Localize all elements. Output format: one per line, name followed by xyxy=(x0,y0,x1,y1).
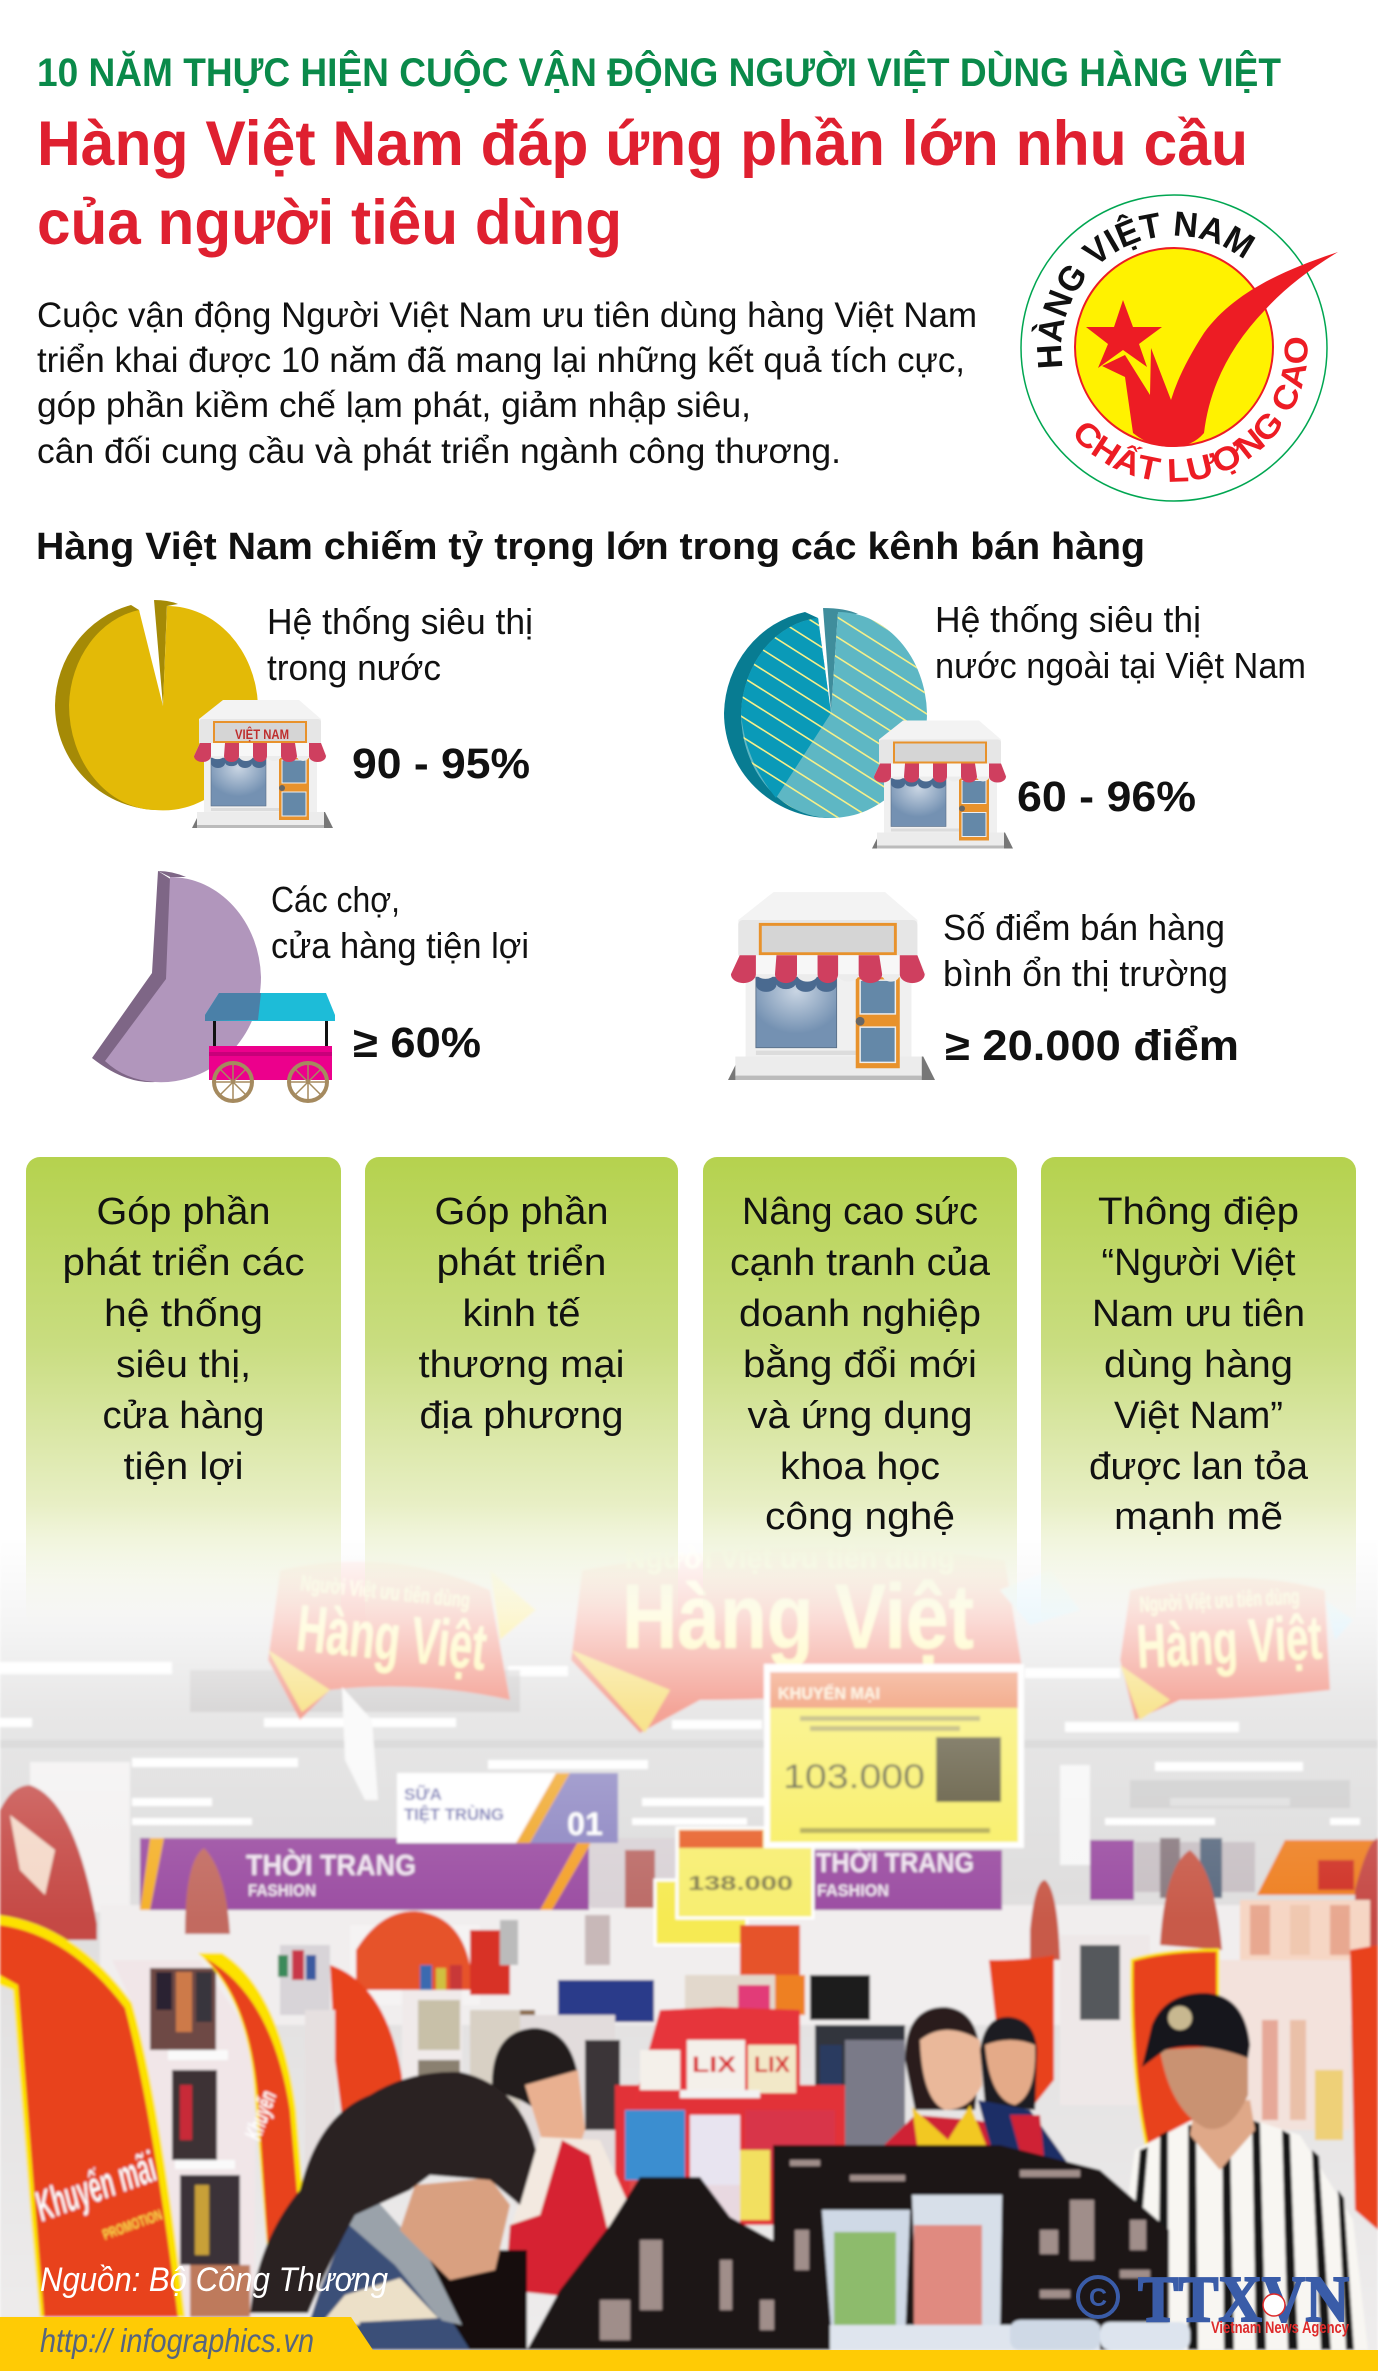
plastic containers xyxy=(822,2195,1190,2350)
panel: markets and convenience stores xyxy=(92,871,529,1101)
intro paragraph: góp phần kiềm chế lạm phát, giảm nhập siêu, xyxy=(37,386,751,425)
panel: foreign supermarkets xyxy=(724,604,1304,848)
panel: market stabilisation points xyxy=(728,892,1239,1080)
banners Hàng Việt: Người Việt ưu tiên dùng xyxy=(299,1570,471,1613)
logo: Hàng Việt Nam chất lượng cao: HÀNG VIỆT NAM xyxy=(1031,212,1256,368)
logo: TTXVN: C xyxy=(1089,2284,1107,2312)
card 3: bằng đổi mới xyxy=(743,1343,977,1386)
card 2: kinh tế xyxy=(462,1293,580,1335)
store sign: VIỆT NAM xyxy=(235,725,289,742)
purple band right xyxy=(813,1850,1002,1910)
banners Hàng Việt xyxy=(268,1561,536,1720)
label: nước ngoài tại Việt Nam xyxy=(935,645,1306,686)
card 3: doanh nghiệp xyxy=(739,1293,981,1335)
pie chart: 60-96% xyxy=(724,608,927,818)
card 2: phát triển xyxy=(436,1242,606,1284)
logo: Hàng Việt Nam chất lượng cao: CHẤT LƯỢNG CAO xyxy=(1076,338,1308,482)
photo: supermarket scene: Người Việt ưu tiên dùng xyxy=(625,1542,955,1575)
intro paragraph: cân đối cung cầu và phát triển ngành công thương. xyxy=(37,432,841,471)
banners Hàng Việt: Hàng Việt xyxy=(294,1590,490,1684)
value: ≥ 60% xyxy=(353,1019,481,1067)
woman 3 xyxy=(879,2007,1030,2165)
intro paragraph xyxy=(37,296,977,471)
card 4: dùng hàng xyxy=(1104,1344,1293,1386)
man 2 xyxy=(978,2017,1080,2180)
photo: supermarket scene: 138.000 xyxy=(688,1873,793,1895)
promo sign: 103.000 xyxy=(783,1758,925,1796)
card 3: Nâng cao sức xyxy=(742,1191,978,1233)
card 3 xyxy=(703,1157,1017,1627)
LIX product stacks: LIX xyxy=(692,2052,736,2077)
woman in foreground xyxy=(250,2072,536,2350)
shelf column left xyxy=(112,1960,255,2317)
white fade over photo xyxy=(0,1500,1378,1920)
logo: TTXVN: TTXVN xyxy=(1138,2263,1349,2336)
sign: Sữa tiệt trùng: TIỆT TRÙNG xyxy=(404,1805,504,1824)
logo: Hàng Việt Nam chất lượng cao xyxy=(1020,194,1338,502)
ceiling lights xyxy=(0,1662,1360,1825)
photo: supermarket scene: FASHION xyxy=(248,1881,316,1900)
title: red headline xyxy=(37,109,1248,258)
card 4: “Người Việt xyxy=(1102,1242,1296,1284)
card 4: được lan tỏa xyxy=(1089,1446,1309,1488)
section heading: Hàng Việt Nam chiếm tỷ trọng lớn trong các kênh bán hàng xyxy=(36,526,1145,568)
red display: left big: PROMOTION xyxy=(101,2207,165,2244)
promo sign: KHUYẾN MẠI xyxy=(778,1684,880,1703)
sign: Sữa tiệt trùng: SỮA xyxy=(404,1784,442,1804)
card 4: mạnh mẽ xyxy=(1114,1496,1283,1538)
label: bình ổn thị trường xyxy=(943,953,1228,994)
card 2: địa phương xyxy=(420,1395,624,1437)
card 1: siêu thị, xyxy=(116,1344,251,1386)
card 1 xyxy=(26,1157,341,1627)
label: trong nước xyxy=(267,647,441,688)
red display: third xyxy=(330,1965,404,2140)
card 4: Việt Nam” xyxy=(1114,1395,1283,1437)
LIX product stacks xyxy=(615,2007,845,2265)
card 3: và ứng dụng xyxy=(748,1395,972,1437)
pie chart: 60% xyxy=(92,871,261,1082)
sign: Sữa tiệt trùng: 01 xyxy=(567,1806,603,1842)
photo: supermarket scene xyxy=(0,1540,1378,2371)
panel: domestic supermarkets xyxy=(55,600,533,828)
label: Số điểm bán hàng xyxy=(943,907,1225,948)
title: red headline: Hàng Việt Nam đáp ứng phần lớn nhu cầu xyxy=(37,109,1248,179)
black bags xyxy=(527,2145,1169,2350)
footer yellow band xyxy=(0,2317,1378,2371)
source text: Nguồn: Bộ Công Thương xyxy=(40,2261,388,2299)
card 3: khoa học xyxy=(780,1446,940,1488)
woman with red apron xyxy=(492,2028,650,2300)
mid shelves row xyxy=(350,1925,480,2005)
photo: supermarket scene: Hàng Việt xyxy=(622,1566,974,1668)
icon: store large xyxy=(728,892,935,1080)
title: red headline: của người tiêu dùng xyxy=(37,188,622,258)
lower wall xyxy=(100,1905,1378,2025)
label xyxy=(935,599,1306,686)
intro paragraph: triển khai được 10 năm đã mang lại những kết quả tích cực, xyxy=(37,341,965,380)
card 2: thương mại xyxy=(418,1344,624,1386)
dark garment xyxy=(422,2250,527,2350)
left pink arch xyxy=(0,1785,97,1940)
purple band left xyxy=(140,1838,589,1910)
red display: left big xyxy=(0,1915,185,2317)
small pink arches xyxy=(185,1848,230,1934)
intro paragraph: Cuộc vận động Người Việt Nam ưu tiên dùng hàng Việt Nam xyxy=(37,296,977,335)
label: cửa hàng tiện lợi xyxy=(271,925,529,966)
card 1: phát triển các xyxy=(62,1242,304,1284)
promo sign xyxy=(764,1664,1024,1848)
photo: supermarket scene: THỜI TRANG xyxy=(816,1847,974,1878)
card 4: Thông điệp xyxy=(1098,1191,1299,1233)
hanging white flag xyxy=(342,1687,378,1800)
icon: store xyxy=(192,700,333,828)
icon: store xyxy=(872,720,1013,848)
icon: food cart xyxy=(205,993,335,1101)
red display: right xyxy=(1132,1950,1218,2160)
pie chart: 90-95% xyxy=(55,600,258,810)
value: 90 - 95% xyxy=(352,740,530,788)
footer band backing xyxy=(0,2317,40,2350)
red display: second xyxy=(198,1953,306,2260)
label: Các chợ, xyxy=(271,879,400,920)
card 1: cửa hàng xyxy=(102,1395,264,1437)
label xyxy=(943,907,1228,994)
label xyxy=(271,879,529,966)
sign: Sữa tiệt trùng xyxy=(397,1773,618,1843)
card 4: Nam ưu tiên xyxy=(1092,1293,1305,1335)
card 1: hệ thống xyxy=(104,1293,263,1335)
value: 60 - 96% xyxy=(1017,773,1196,821)
card 2 xyxy=(365,1157,678,1627)
photo: supermarket scene: THỜI TRANG xyxy=(246,1848,416,1882)
red display: left big: Khuyến mãi xyxy=(29,2142,163,2231)
man with cap xyxy=(1125,1993,1368,2350)
label xyxy=(267,601,533,688)
small yellow signs xyxy=(655,1880,747,1945)
card 2: Góp phần xyxy=(434,1191,608,1233)
red display: mid right xyxy=(989,1955,1054,2110)
title: green kicker: 10 NĂM THỰC HIỆN CUỘC VẬN ĐỘNG NGƯỜI VIỆT DÙNG HÀNG VIỆT xyxy=(37,49,1281,95)
background aisle dark xyxy=(515,2015,615,2205)
website url: http:// infographics.vn xyxy=(40,2322,314,2359)
photo: supermarket scene: FASHION xyxy=(817,1881,889,1900)
right shelves xyxy=(1060,1935,1150,2105)
red display: second: Khuyến xyxy=(240,2087,282,2144)
value: ≥ 20.000 điểm xyxy=(945,1022,1239,1070)
LIX product stacks: LIX xyxy=(754,2052,790,2077)
label: Hệ thống siêu thị xyxy=(267,601,533,642)
card 3: công nghệ xyxy=(765,1496,955,1538)
card 3: cạnh tranh của xyxy=(730,1242,991,1284)
card 1: tiện lợi xyxy=(124,1446,244,1488)
card 4 xyxy=(1041,1157,1356,1627)
card 1: Góp phần xyxy=(96,1191,270,1233)
label: Hệ thống siêu thị xyxy=(935,599,1201,640)
